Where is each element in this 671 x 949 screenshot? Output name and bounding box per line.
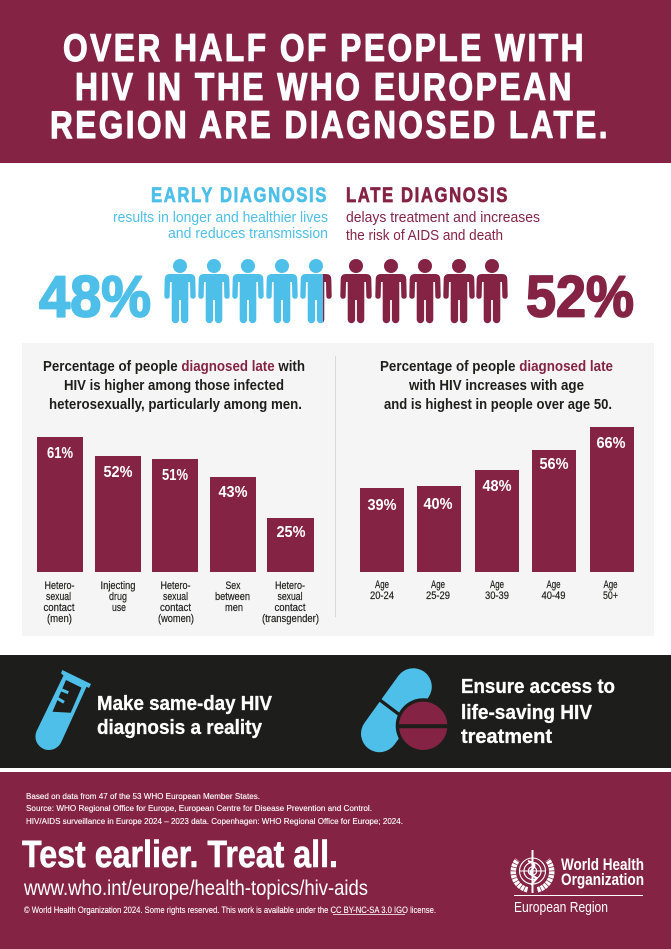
call to action: treatment: life-saving HIV bbox=[461, 701, 592, 724]
bar chart: age: 50+ bbox=[603, 590, 618, 602]
call to action: diagnosis: Make same-day HIV bbox=[97, 692, 272, 715]
bar chart: transmission mode: drug bbox=[109, 591, 127, 603]
panel: charts bbox=[22, 343, 654, 636]
early diagnosis text block: EARLY DIAGNOSIS bbox=[151, 184, 328, 207]
call to action: treatment bbox=[461, 675, 615, 748]
bar chart: transmission mode: 25% bbox=[276, 524, 306, 541]
left chart heading bbox=[43, 359, 305, 413]
late diagnosis text block bbox=[346, 184, 540, 244]
bar chart: transmission mode: contact bbox=[44, 602, 74, 614]
late percentage 52%: 52% bbox=[526, 264, 634, 330]
bar chart: age: Age bbox=[490, 579, 504, 591]
bar chart: transmission mode: sexual bbox=[278, 591, 302, 603]
copyright line: © World Health Organization 2024. Some rights reserved. This work is available under the CC BY-NC-SA 3.0 IGO license. bbox=[24, 905, 436, 915]
call to action: diagnosis: diagnosis a reality bbox=[97, 716, 263, 739]
bar chart: age: Age bbox=[375, 579, 389, 591]
bar chart: transmission mode: 52% bbox=[104, 464, 133, 481]
bar chart: transmission mode: Hetero- bbox=[44, 580, 75, 592]
people pictogram bbox=[164, 259, 508, 323]
early diagnosis people bbox=[164, 259, 332, 323]
bar chart: transmission mode bbox=[37, 437, 319, 625]
bar chart: transmission mode: (transgender) bbox=[262, 613, 319, 625]
logo: WHO European Region: Organization bbox=[561, 871, 644, 889]
bar chart: transmission mode: Hetero- bbox=[160, 580, 191, 592]
bar chart: transmission mode: use bbox=[112, 602, 126, 614]
bar chart: transmission mode: contact bbox=[274, 602, 306, 614]
header banner bbox=[0, 0, 671, 163]
bar chart: transmission mode: sexual bbox=[46, 591, 71, 603]
slogan: Test earlier. Treat all. bbox=[22, 834, 338, 876]
bar chart: transmission mode: 43% bbox=[218, 484, 248, 501]
late diagnosis text block: delays treatment and increases bbox=[346, 209, 540, 226]
logo: WHO European Region: European Region bbox=[514, 900, 608, 916]
bar chart: age: 39% bbox=[368, 497, 397, 514]
logo: WHO European Region bbox=[513, 850, 644, 916]
early diagnosis text block bbox=[113, 184, 328, 242]
right chart heading: and is highest in people over age 50. bbox=[384, 397, 612, 413]
bar chart: transmission mode: sexual bbox=[163, 591, 188, 603]
bar chart: transmission mode: 61% bbox=[47, 445, 73, 462]
icon: pills bbox=[370, 687, 451, 753]
right chart heading: with HIV increases with age bbox=[408, 378, 584, 394]
bar chart: age: 66% bbox=[596, 435, 626, 452]
right chart heading: Percentage of people diagnosed late bbox=[380, 359, 613, 375]
bar chart: age: 30-39 bbox=[485, 590, 509, 602]
left chart heading: heterosexually, particularly among men. bbox=[49, 397, 302, 413]
bar chart: transmission mode: men bbox=[225, 602, 243, 614]
title: HIV IN THE WHO EUROPEAN bbox=[75, 66, 574, 109]
call to action: diagnosis bbox=[97, 692, 272, 739]
bar chart: age: 48% bbox=[482, 478, 512, 495]
icon: WHO emblem bbox=[513, 850, 552, 893]
early diagnosis text block: results in longer and healthier lives bbox=[113, 209, 328, 226]
bar chart: transmission mode: 51% bbox=[162, 467, 188, 484]
bar chart: transmission mode: Sex bbox=[226, 580, 241, 592]
left chart heading: Percentage of people diagnosed late with bbox=[43, 359, 305, 375]
call to action: treatment: treatment bbox=[461, 725, 552, 748]
bar chart: age: 56% bbox=[540, 456, 569, 473]
late diagnosis text block: the risk of AIDS and death bbox=[346, 227, 503, 244]
left chart heading: HIV is higher among those infected bbox=[64, 378, 284, 394]
bar chart: transmission mode: (women) bbox=[158, 613, 194, 625]
bar chart: age bbox=[360, 427, 634, 602]
right chart heading bbox=[380, 359, 613, 413]
early percentage 48%: 48% bbox=[39, 264, 151, 330]
panel: footer bbox=[0, 772, 671, 949]
early diagnosis text block: and reduces transmission bbox=[168, 225, 328, 242]
panel: calls to action bbox=[0, 655, 671, 768]
bar chart: transmission mode: Hetero- bbox=[275, 580, 305, 592]
bar chart: transmission mode: contact bbox=[160, 602, 191, 614]
bar chart: age: Age bbox=[431, 579, 445, 591]
bar chart: transmission mode: between bbox=[215, 591, 250, 603]
source notes: Source: WHO Regional Office for Europe, European Centre for Disease Prevention and Control. bbox=[26, 803, 372, 813]
call to action: treatment: Ensure access to bbox=[461, 675, 615, 698]
bar chart: age: Age bbox=[604, 579, 618, 591]
source notes bbox=[26, 791, 403, 826]
late diagnosis people bbox=[323, 259, 508, 324]
bar chart: transmission mode: Injecting bbox=[100, 580, 136, 592]
bar chart: age: 40-49 bbox=[542, 590, 566, 602]
bar chart: age: 20-24 bbox=[370, 590, 394, 602]
icon: test tube bbox=[35, 670, 91, 750]
bar chart: transmission mode: (men) bbox=[47, 613, 72, 625]
logo: WHO European Region: World Health bbox=[561, 856, 644, 874]
website link: www.who.int/europe/health-topics/hiv-aids bbox=[23, 877, 368, 900]
bar chart: age: Age bbox=[546, 579, 560, 591]
bar chart: age: 40% bbox=[424, 496, 453, 513]
source notes: Based on data from 47 of the 53 WHO European Member States. bbox=[26, 791, 260, 801]
source notes: HIV/AIDS surveillance in Europe 2024 – 2023 data. Copenhagen: WHO Regional Office for Europe; 2024. bbox=[26, 816, 403, 826]
bar chart: age: 25-29 bbox=[426, 590, 450, 602]
title bbox=[50, 27, 610, 147]
late diagnosis text block: LATE DIAGNOSIS bbox=[346, 184, 509, 207]
